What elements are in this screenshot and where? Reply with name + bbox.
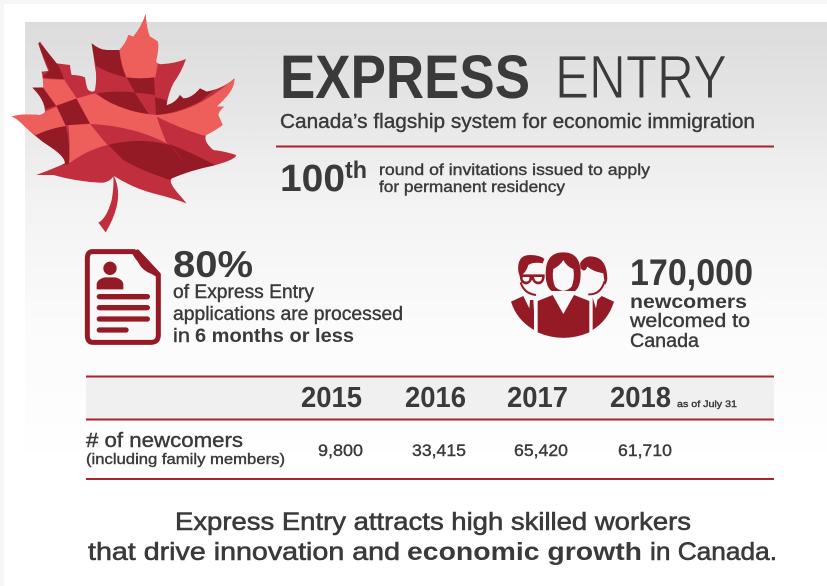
stat: 80 percent: 80% (173, 244, 253, 285)
table header band (86, 377, 774, 419)
closing statement: Express Entry attracts high skilled workers (175, 508, 691, 536)
closing statement (88, 508, 777, 566)
100th round callout (280, 157, 650, 200)
title (280, 43, 727, 111)
year headers: 2016 (405, 382, 466, 414)
icon: three people (511, 252, 614, 338)
stat: 170,000 newcomers: welcomed to (629, 311, 750, 332)
row label (86, 430, 285, 468)
100th round callout: 100 (280, 158, 345, 200)
year headers: 2018 (610, 382, 671, 414)
year headers: 2017 (507, 382, 568, 414)
100th round callout: th (345, 157, 367, 184)
stat: 80 percent: 6 months or less (195, 326, 354, 347)
stat: 170,000 newcomers: 170,000 (630, 252, 753, 293)
100th round callout: round of invitations issued to apply (379, 162, 650, 179)
closing statement: in Canada. (650, 538, 777, 566)
row values: 9,800 (318, 441, 363, 460)
subtitle: Canada’s flagship system for economic immigration (280, 111, 755, 133)
divider rule (276, 146, 774, 148)
stat: 80 percent (173, 244, 403, 347)
table: newcomers by year (86, 376, 774, 480)
row values: 61,710 (618, 441, 672, 460)
icon: application document (87, 249, 161, 342)
row label: (including family members) (86, 451, 285, 468)
closing statement: that drive innovation and (88, 538, 400, 566)
year headers (301, 382, 737, 414)
stat: 80 percent: of Express Entry (173, 282, 314, 303)
title: ENTRY (555, 43, 727, 111)
closing statement: economic growth (407, 538, 642, 566)
stat: 170,000 newcomers: newcomers (630, 292, 747, 313)
background gradient panel (25, 22, 827, 452)
title: EXPRESS (280, 43, 530, 111)
stat: 170,000 newcomers: Canada (630, 331, 699, 352)
year headers: 2015 (301, 382, 362, 414)
icon: maple leaf (12, 14, 236, 232)
row values: 65,420 (514, 441, 568, 460)
row values: 33,415 (412, 441, 466, 460)
stat: 80 percent: applications are processed (173, 304, 403, 325)
row values (318, 441, 672, 460)
year headers: as of July 31 (677, 399, 737, 410)
row label: # of newcomers (86, 430, 243, 452)
stat: 170,000 newcomers (629, 252, 753, 352)
100th round callout: for permanent residency (379, 179, 565, 196)
stat: 80 percent: in (173, 326, 190, 347)
